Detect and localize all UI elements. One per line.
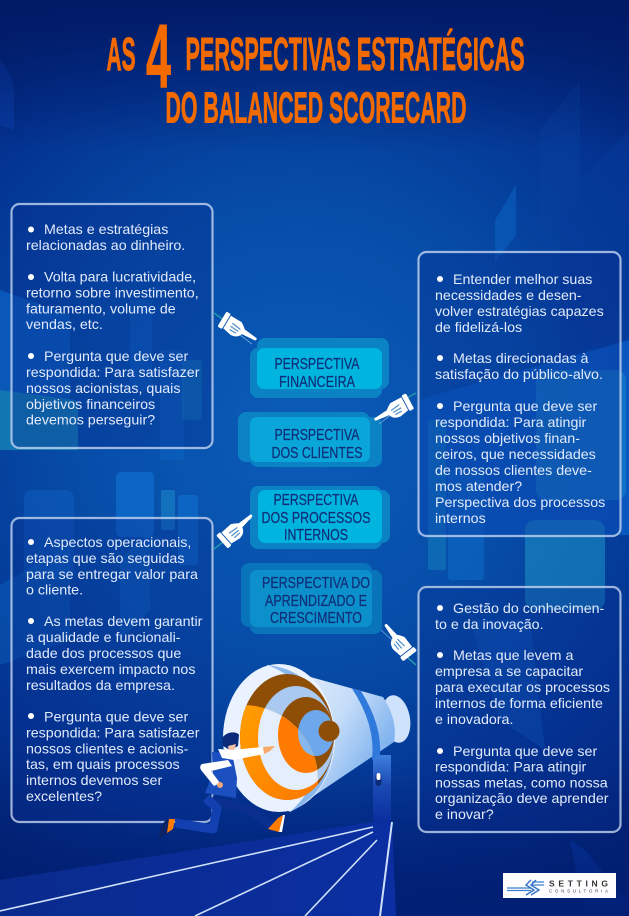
panel: perspectiva do aprendizado text: Metas que levem a	[453, 648, 573, 664]
label: perspectiva dos processos internos: INTERNOS	[284, 527, 348, 544]
panel: perspectiva dos processos internos text: internos devemos ser	[26, 773, 162, 789]
panel: perspectiva dos processos internos text: tas, em quais processos	[26, 757, 180, 773]
panel: perspectiva dos clientes text: Entender melhor suas	[453, 272, 592, 288]
title: AS	[106, 28, 136, 80]
label: perspectiva dos processos internos: DOS PROCESSOS	[262, 510, 370, 527]
logo: setting consultoria: CONSULTORIA	[549, 888, 608, 894]
panel: perspectiva financeira text	[12, 204, 212, 448]
panel: perspectiva dos clientes text: satisfação do público-alvo.	[435, 367, 603, 383]
panel: perspectiva dos processos internos text: a qualidade e funcionali-	[26, 630, 181, 646]
icon: hand pointing to financeira	[214, 312, 261, 348]
label: perspectiva financeira: FINANCEIRA	[279, 374, 356, 391]
panel: perspectiva financeira text: Pergunta que deve ser	[44, 349, 188, 365]
panel: perspectiva do aprendizado text: Pergunta que deve ser	[453, 744, 597, 760]
panel: perspectiva financeira text: nossos acionistas, quais	[26, 381, 180, 397]
panel: perspectiva do aprendizado text: e inovar?	[435, 807, 494, 823]
panel: perspectiva financeira text: respondida: Para satisfazer	[26, 365, 200, 381]
panel: perspectiva dos clientes text: de fidelizá-los	[435, 320, 522, 336]
title: 4	[146, 7, 171, 107]
panel: perspectiva dos processos internos text: para se entregar valor para	[26, 567, 198, 583]
panel: perspectiva dos processos internos text: mais exercem impacto nos	[26, 662, 195, 678]
post	[373, 755, 391, 823]
panel: perspectiva dos clientes text: Pergunta que deve ser	[453, 399, 597, 415]
panel: perspectiva dos processos internos text: Pergunta que deve ser	[44, 710, 188, 726]
panel: perspectiva dos processos internos text: As metas devem garantir	[44, 614, 203, 630]
panel: perspectiva financeira text: vendas, etc.	[26, 317, 103, 333]
panel: perspectiva financeira text: Metas e estratégias	[44, 222, 168, 238]
panel: perspectiva dos clientes text: respondida: Para atingir	[435, 415, 587, 431]
panel: perspectiva dos clientes text: Metas direcionadas à	[453, 351, 589, 367]
panel: perspectiva dos clientes text: volver estratégias capazes	[435, 304, 604, 320]
icon: hand pointing to aprendizado	[378, 619, 417, 665]
panel: perspectiva dos processos internos text	[12, 518, 212, 822]
panel: perspectiva do aprendizado text	[418, 587, 620, 832]
icon: hand pointing to clientes	[370, 393, 416, 428]
label: perspectiva financeira	[250, 338, 389, 398]
panel: perspectiva dos processos internos text: respondida: Para satisfazer	[26, 726, 200, 742]
panel: perspectiva financeira text: objetivos financeiros	[26, 397, 155, 413]
panel: perspectiva do aprendizado text: Gestão do conhecimen-	[453, 601, 605, 617]
panel: perspectiva do aprendizado text: organização deve aprender	[435, 791, 609, 807]
panel: perspectiva financeira text: relacionadas ao dinheiro.	[26, 238, 185, 254]
panel: perspectiva do aprendizado text: e inovadora.	[435, 712, 513, 728]
title	[106, 7, 524, 132]
label: perspectiva do aprendizado e crescimento: CRESCIMENTO	[270, 610, 362, 627]
label: perspectiva do aprendizado e crescimento: APRENDIZADO E	[265, 593, 367, 610]
label: perspectiva dos clientes: DOS CLIENTES	[272, 445, 362, 462]
label: perspectiva financeira: PERSPECTIVA	[274, 356, 360, 373]
panel: perspectiva dos processos internos text: excelentes?	[26, 789, 102, 805]
panel: perspectiva dos processos internos text: o cliente.	[26, 582, 83, 598]
panel: perspectiva financeira text: retorno sobre investimento,	[26, 286, 199, 302]
label: perspectiva dos clientes	[238, 412, 382, 467]
panel: perspectiva financeira text: Volta para lucratividade,	[44, 270, 196, 286]
panel: perspectiva dos clientes text: Perspectiva dos processos	[435, 495, 605, 511]
label: perspectiva do aprendizado e crescimento	[241, 563, 382, 634]
panel: perspectiva do aprendizado text: para executar os processos	[435, 680, 610, 696]
icon: megaphone	[223, 664, 414, 812]
logo: setting consultoria	[503, 873, 616, 898]
logo: setting consultoria: SETTING	[549, 878, 608, 888]
panel: perspectiva do aprendizado text: nossas metas, como nossa	[435, 776, 608, 792]
panel: perspectiva financeira text: faturamento, volume de	[26, 302, 176, 318]
label: perspectiva dos processos internos	[250, 486, 390, 549]
panel: perspectiva dos clientes text: necessidades e desen-	[435, 288, 582, 304]
panel: perspectiva dos clientes text	[418, 252, 620, 536]
panel: perspectiva dos clientes text: nossos objetivos finan-	[435, 431, 580, 447]
panel: perspectiva do aprendizado text: internos de forma eficiente	[435, 696, 603, 712]
panel: perspectiva do aprendizado text: empresa a se capacitar	[435, 664, 583, 680]
panel: perspectiva dos processos internos text: resultados da empresa.	[26, 678, 175, 694]
panel: perspectiva do aprendizado text: to e da inovação.	[435, 617, 544, 633]
panel: perspectiva do aprendizado text: respondida: Para atingir	[435, 760, 587, 776]
icon: running man	[159, 732, 285, 839]
panel: perspectiva dos clientes text: internos	[435, 511, 486, 527]
road	[0, 822, 396, 916]
panel: perspectiva financeira text: devemos perseguir?	[26, 412, 155, 428]
panel: perspectiva dos processos internos text: Aspectos operacionais,	[44, 535, 191, 551]
panel: perspectiva dos processos internos text: etapas que são seguidas	[26, 551, 184, 567]
panel: perspectiva dos clientes text: de nossos clientes deve-	[435, 463, 592, 479]
panel: perspectiva dos clientes text: mos atender?	[435, 479, 522, 495]
icon: hand pointing to processos	[214, 509, 258, 549]
label: perspectiva dos processos internos: PERSPECTIVA	[274, 492, 359, 509]
label: perspectiva do aprendizado e crescimento: PERSPECTIVA DO	[262, 575, 370, 592]
panel: perspectiva dos clientes text: ceiros, que necessidades	[435, 447, 596, 463]
label: perspectiva dos clientes: PERSPECTIVA	[274, 427, 360, 444]
panel: perspectiva dos processos internos text: dade dos processos que	[26, 646, 181, 662]
panel: perspectiva dos processos internos text: nossos clientes e acionis-	[26, 742, 189, 758]
